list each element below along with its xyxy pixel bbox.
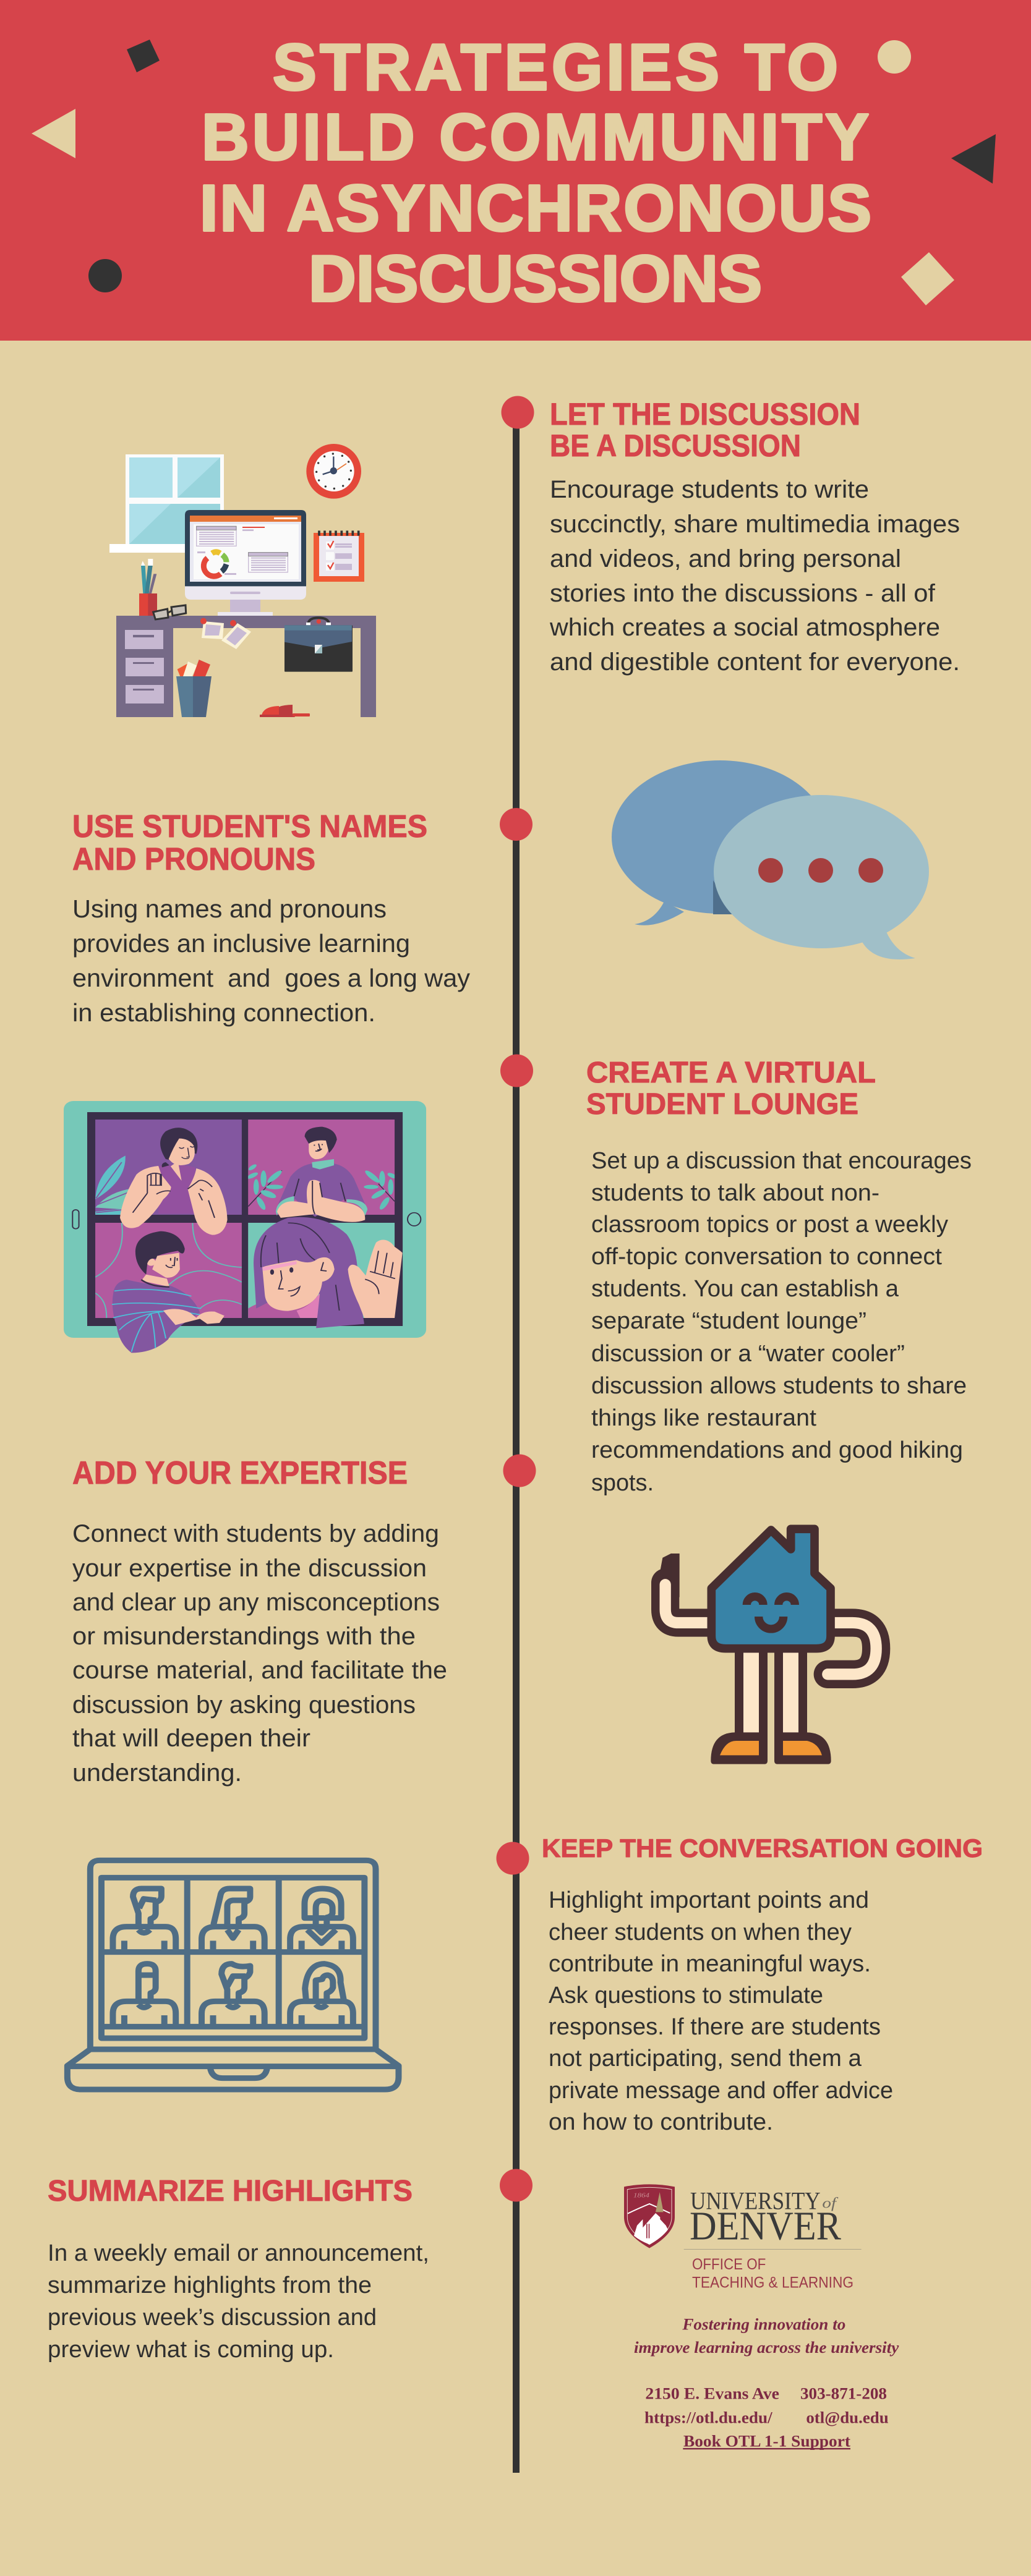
body text: stories into the discussions - all of — [550, 580, 936, 607]
body text — [549, 1887, 893, 2135]
leaves top-left — [95, 1156, 129, 1215]
contact details: 303-871-208 — [800, 2385, 887, 2403]
heading: LET THE DISCUSSION — [550, 397, 860, 431]
logo: wordmark: UNIVERSITY — [690, 2187, 821, 2214]
heading — [72, 809, 427, 877]
person: man with collared shirt — [276, 1127, 367, 1222]
body text — [591, 1148, 972, 1496]
window — [109, 454, 224, 553]
panel backgrounds — [95, 1120, 395, 1318]
body text — [549, 476, 960, 676]
briefcase — [284, 618, 353, 672]
logo: wordmark — [690, 2187, 841, 2249]
section 3: create a virtual student lounge — [586, 1056, 972, 1496]
teal curves bottom-left — [95, 1223, 242, 1318]
person: woman with ponytail — [120, 1128, 228, 1235]
contact details — [644, 2385, 889, 2450]
tagline: Fostering innovation to — [682, 2315, 845, 2333]
title — [200, 31, 871, 315]
body text: in establishing connection. — [72, 998, 375, 1027]
body text: previous week’s discussion and — [48, 2305, 377, 2331]
body text: contribute in meaningful ways. — [549, 1951, 871, 1977]
body text: Ask questions to stimulate — [549, 1983, 823, 2009]
icon: laptop with video grid — [67, 1860, 398, 2089]
tablet frame — [64, 1101, 426, 1338]
body text: which creates a social atmosphere — [549, 614, 940, 641]
logo: office of teaching and learning: OFFICE OF — [692, 2256, 766, 2273]
body text: discussion allows students to share — [591, 1373, 967, 1399]
body text: Set up a discussion that encourages — [591, 1148, 972, 1174]
contact details: otl@du.edu — [806, 2408, 889, 2426]
body text: students to talk about non- — [591, 1180, 879, 1206]
illustration: tablet video call — [64, 1101, 426, 1353]
logo: wordmark: of — [822, 2196, 839, 2212]
person: girl waving — [248, 1217, 403, 1328]
section 6: summarize highlights — [48, 2175, 429, 2363]
contact details: Book OTL 1-1 Support — [683, 2432, 850, 2450]
tagline — [634, 2315, 899, 2357]
body text: things like restaurant — [591, 1405, 816, 1431]
face — [747, 1597, 795, 1629]
body text: students. You can establish a — [591, 1276, 899, 1302]
arms — [660, 1554, 876, 1674]
body text: or misunderstandings with the — [72, 1623, 416, 1650]
section 1: let the discussion be a discussion — [549, 397, 960, 676]
body text: on how to contribute. — [549, 2109, 773, 2135]
illustration: desk with computer — [109, 444, 376, 717]
title: STRATEGIES TO — [273, 31, 838, 104]
icon: speech bubbles — [612, 760, 929, 959]
section 2: use student's names and pronouns — [72, 809, 470, 1027]
body text: Encourage students to write — [550, 476, 869, 503]
title: DISCUSSIONS — [309, 242, 762, 315]
heading: SUMMARIZE HIGHLIGHTS — [48, 2175, 413, 2208]
tagline: improve learning across the university — [634, 2339, 899, 2357]
body text: understanding. — [72, 1759, 242, 1787]
body text — [72, 1520, 447, 1787]
desk — [116, 616, 376, 717]
laptop frame — [67, 1860, 398, 2089]
slippers — [260, 705, 310, 717]
body text: that will deepen their — [72, 1725, 310, 1752]
clock — [306, 444, 361, 499]
body text: not participating, send them a — [549, 2046, 862, 2072]
heading — [550, 397, 860, 463]
heading: USE STUDENT'S NAMES — [72, 809, 427, 844]
body text: responses. If there are students — [549, 2014, 881, 2040]
body text: separate “student lounge” — [591, 1308, 866, 1334]
header banner — [0, 0, 1031, 341]
pencil cup — [139, 559, 157, 616]
body text: cheer students on when they — [549, 1919, 852, 1945]
body text: off-topic conversation to connect — [591, 1244, 942, 1270]
body text: preview what is coming up. — [48, 2337, 334, 2363]
participants — [113, 1889, 353, 2024]
body text: and clear up any misconceptions — [72, 1589, 440, 1616]
body text: classroom topics or post a weekly — [591, 1212, 948, 1238]
waste bin — [176, 660, 212, 717]
body text: spots. — [591, 1470, 654, 1496]
logo: office of teaching and learning — [692, 2256, 853, 2292]
body text: and videos, and bring personal — [550, 545, 901, 572]
timeline line — [513, 402, 520, 2473]
heading: CREATE A VIRTUAL — [586, 1056, 876, 1089]
body text — [72, 895, 470, 1027]
person: boy in striped sweater — [112, 1231, 225, 1353]
body text — [48, 2240, 429, 2363]
body text: provides an inclusive learning — [72, 929, 410, 958]
body text: Highlight important points and — [549, 1887, 869, 1913]
glasses — [153, 605, 186, 619]
logo: shield — [624, 2184, 675, 2248]
body text: discussion by asking questions — [72, 1691, 416, 1719]
logo: shield: 1864 — [633, 2192, 649, 2199]
body text: Connect with students by adding — [72, 1520, 439, 1547]
body text: Using names and pronouns — [72, 895, 387, 923]
house body — [711, 1529, 831, 1649]
computer monitor — [185, 510, 306, 616]
body text: discussion or a “water cooler” — [591, 1341, 905, 1367]
contact details: 2150 E. Evans Ave — [645, 2385, 779, 2403]
title: IN ASYNCHRONOUS — [200, 172, 871, 245]
heading: STUDENT LOUNGE — [586, 1088, 858, 1121]
body text: summarize highlights from the — [48, 2272, 372, 2298]
section 4: add your expertise — [72, 1455, 447, 1787]
body text: private message and offer advice — [549, 2078, 893, 2104]
body text: your expertise in the discussion — [72, 1555, 427, 1582]
pinned notes — [200, 618, 251, 649]
timeline dots — [496, 396, 536, 2202]
calendar checklist — [314, 530, 364, 582]
body text: and digestible content for everyone. — [550, 648, 960, 676]
body text: succinctly, share multimedia images — [550, 511, 960, 538]
heading — [586, 1056, 876, 1121]
leaves top-right — [246, 1163, 398, 1211]
section 5: keep the conversation going — [542, 1834, 983, 2135]
legs and feet — [711, 1651, 831, 1764]
body text: In a weekly email or announcement, — [48, 2240, 429, 2266]
heading: BE A DISCUSSION — [550, 428, 801, 463]
icon: smiling house character — [660, 1529, 876, 1764]
title: BUILD COMMUNITY — [202, 101, 869, 174]
heading: AND PRONOUNS — [72, 841, 315, 877]
logo and contact block — [624, 2184, 899, 2450]
body text: environment and goes a long way — [72, 964, 470, 992]
decorative shapes — [32, 40, 996, 305]
heading: ADD YOUR EXPERTISE — [72, 1455, 408, 1491]
body text: recommendations and good hiking — [591, 1437, 963, 1463]
heading: KEEP THE CONVERSATION GOING — [542, 1834, 983, 1863]
body text: course material, and facilitate the — [72, 1657, 447, 1684]
logo: office of teaching and learning: TEACHING & LEARNING — [692, 2274, 853, 2292]
logo: wordmark: DENVER — [690, 2204, 841, 2249]
contact details: https://otl.du.edu/ — [644, 2408, 772, 2426]
